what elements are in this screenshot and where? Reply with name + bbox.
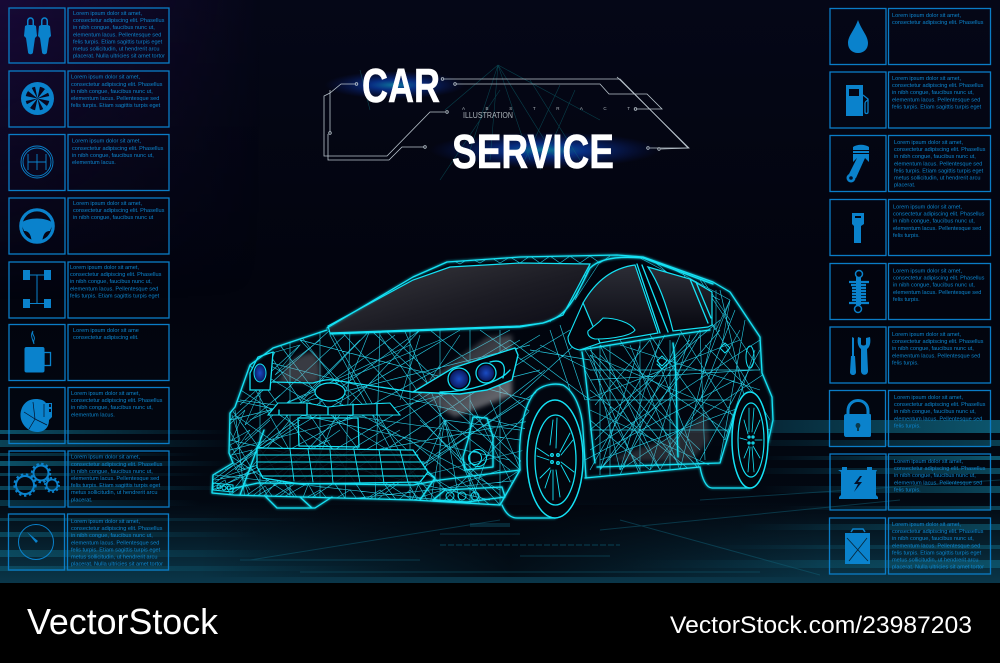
text: consectetur adipiscing elit. Phasellus (72, 146, 164, 152)
text: in nibh congue, faucibus nunc ut, (892, 346, 974, 352)
text: in nibh congue, faucibus nunc ut, (894, 473, 976, 479)
text: in nibh congue, faucibus nunc ut, (893, 219, 975, 225)
text: elementum lacus. Pellentesque sed (894, 161, 982, 167)
text: consectetur adipiscing elit. Phasellus (71, 462, 163, 468)
icon: oil drop (848, 20, 868, 53)
text: in nibh congue, faucibus nunc ut, (71, 469, 153, 475)
car: front wheel (527, 400, 583, 518)
icon: gear shifter (21, 146, 53, 178)
car: A pillar and mirror (568, 303, 635, 350)
text: in nibh congue, faucibus nunc ut, (70, 279, 152, 285)
car: windshield (328, 263, 590, 333)
text: Lorem ipsum dolor sit amet, (73, 11, 142, 17)
text: consectetur adipiscing elit. Phasellus (71, 82, 163, 88)
text: consectetur adipiscing elit. Phasellus (892, 83, 984, 89)
text: Lorem ipsum dolor sit amet, (72, 139, 141, 145)
text: consectetur adipiscing elit. Phasellus (71, 398, 163, 404)
text: felis turpis. Etiam sagittis turpis eget (71, 483, 161, 489)
watermark: brand: VectorStock (27, 601, 219, 642)
text: felis turpis. Etiam sagittis turpis eget (70, 293, 160, 299)
text: elementum lacus. Pellentesque sed (71, 96, 159, 102)
text: felis turpis. Etiam sagittis turpis eget (894, 168, 984, 174)
text: elementum lacus. Pellentesque sed (892, 97, 980, 103)
icon: gears (14, 464, 59, 496)
panel: right 1 oil drop (830, 8, 990, 64)
panel: left 5 chassis (9, 262, 169, 318)
icon: coffee mug (24, 331, 50, 372)
text: Lorem ipsum dolor sit amet, (894, 395, 963, 401)
text: Lorem ipsum dolor sit amet, (71, 519, 140, 525)
car: hood reflections (273, 335, 710, 462)
text: felis turpis. (893, 233, 920, 239)
car: body mesh (205, 250, 780, 510)
text: metus sollicitudin, ut hendrerit arcu (894, 176, 980, 182)
icon: key (852, 213, 864, 243)
text: placerat. Nulla ultricies sit amet tortor (71, 562, 163, 568)
car: small lamps and details (213, 343, 754, 500)
text: felis turpis. (894, 423, 921, 429)
car: side windows (583, 264, 712, 343)
text: elementum lacus. Pellentesque sed (73, 32, 161, 38)
footer band (0, 583, 1000, 663)
text: in nibh congue, faucibus nunc ut, (894, 154, 976, 160)
text: Lorem ipsum dolor sit amet, (71, 455, 140, 461)
text: consectetur adipiscing elit. Phasellus (71, 526, 163, 532)
text: Lorem ipsum dolor sit amet, (73, 201, 142, 207)
text: in nibh congue, faucibus nunc ut, (894, 409, 976, 415)
text: Lorem ipsum dolor sit amet, (892, 332, 961, 338)
panel: left 7 brake disc (9, 388, 169, 444)
text: Lorem ipsum dolor sit amet, (892, 13, 961, 19)
text: felis turpis. Etiam sagittis turpis eget (73, 39, 163, 45)
car: rear wheel (732, 392, 768, 488)
text: felis turpis. (894, 487, 921, 493)
text: in nibh congue, faucibus nunc ut, (73, 25, 155, 31)
panel: left 1 seats (9, 8, 169, 63)
text: Lorem ipsum dolor sit amet, (892, 522, 961, 528)
text: elementum lacus. Pellentesque sed (71, 476, 159, 482)
car: grille and plate (257, 380, 428, 484)
panel: left 3 gear shifter (9, 134, 169, 190)
text: elementum lacus. Pellentesque sed (894, 480, 982, 486)
text: elementum lacus. Pellentesque sed (894, 416, 982, 422)
text: placerat. Nulla ultricies sit amet tortor (892, 565, 984, 571)
text: felis turpis. (892, 360, 919, 366)
text: placerat. Nulla ultricies sit amet tortor (73, 54, 165, 60)
panel: left 9 gauge (8, 514, 168, 570)
text: in nibh congue, faucibus nunc ut, (72, 153, 154, 159)
text: elementum lacus. Pellentesque sed (892, 543, 980, 549)
text: in nibh congue, faucibus nunc ut, (893, 283, 975, 289)
subtitle: abstract: A B S T R A C T (462, 106, 630, 111)
text: Lorem ipsum dolor sit amet, (71, 391, 140, 397)
car: headlights (250, 348, 518, 394)
text: Lorem ipsum dolor sit amet, (70, 265, 139, 271)
icon: battery (838, 467, 878, 499)
text: placerat. (894, 183, 916, 189)
icon: seats (24, 17, 51, 54)
text: in nibh congue, faucibus nunc ut, (892, 90, 974, 96)
watermark: url: VectorStock.com/23987203 (670, 612, 972, 639)
text: in nibh congue, faucibus nunc ut, (892, 536, 974, 542)
wireframe car (205, 250, 780, 518)
text: felis turpis. Etiam sagittis turpis eget (71, 103, 161, 109)
text: felis turpis. (893, 297, 920, 303)
text: felis turpis. Etiam sagittis turpis eget (71, 547, 161, 553)
text: in nibh congue, faucibus nunc ut (73, 215, 154, 221)
icon: piston (846, 145, 869, 182)
car: body outline (212, 255, 773, 518)
text: elementum lacus. (71, 412, 115, 418)
text: metus sollicitudin, ut hendrerit arcu (71, 490, 157, 496)
panel: left 6 coffee mug (9, 324, 169, 380)
text: Lorem ipsum dolor sit amet, (894, 459, 963, 465)
text: elementum lacus. Pellentesque sed (893, 290, 981, 296)
panel: right 6 tools (830, 327, 990, 383)
text: consectetur adipiscing elit. Phasellus (892, 339, 984, 345)
heading: SERVICE: SERVICE (452, 126, 614, 179)
text: elementum lacus. Pellentesque sed (893, 226, 981, 232)
text: consectetur adipiscing elit. Phasellus (894, 402, 986, 408)
text: Lorem ipsum dolor sit amet, (893, 268, 962, 274)
icon: canister (845, 529, 870, 564)
panel: left 2 turbine wheel (9, 71, 169, 127)
panel: right 9 canister (830, 518, 990, 574)
title glow (325, 65, 660, 180)
text: Lorem ipsum dolor sit amet, (893, 204, 962, 210)
heading: CAR: CAR (362, 60, 440, 113)
icon: brake disc (20, 399, 52, 432)
panel: right 5 spring (830, 264, 990, 320)
panel: left 4 steering wheel (9, 198, 169, 254)
text: metus sollicitudin, ut hendrerit arcu (892, 558, 978, 564)
text: Lorem ipsum dolor sit amet, (892, 76, 961, 82)
icon: steering wheel (21, 210, 53, 243)
icon: tools (850, 337, 870, 375)
text: consectetur adipiscing elit. Phasellus (893, 276, 985, 282)
text: Lorem ipsum dolor sit amet, (894, 140, 963, 146)
icon: shock spring (849, 270, 869, 312)
text: in nibh congue, faucibus nunc ut, (71, 405, 153, 411)
text: consectetur adipiscing elit. Phasellus (892, 529, 984, 535)
text: metus sollicitudin, ut hendrerit arcu (73, 46, 159, 52)
text: consectetur adipiscing elit. Phasellus (892, 20, 984, 26)
text: consectetur adipiscing elit. Phasellus (73, 208, 165, 214)
HUD circuit lines (324, 77, 689, 160)
panel: right 8 battery (830, 454, 990, 510)
text: elementum lacus. (72, 160, 116, 166)
subtitle: illustration: ILLUSTRATION (463, 111, 513, 120)
text: elementum lacus. Pellentesque sed (70, 286, 158, 292)
text: felis turpis. Etiam sagittis turpis eget (892, 550, 982, 556)
text: consectetur adipiscing elit. Phasellus (73, 18, 165, 24)
text: consectetur adipiscing elit. Phasellus (894, 147, 986, 153)
text: metus sollicitudin, ut hendrerit arcu (71, 554, 157, 560)
panel: right 3 piston (830, 136, 990, 192)
text: consectetur adipiscing elit. Phasellus (893, 212, 985, 218)
icon: turbine wheel (21, 82, 54, 115)
text: Lorem ipsum dolor sit ame (73, 328, 139, 334)
icon: chassis (23, 270, 51, 308)
icon: fuel pump (846, 85, 868, 116)
panel: right 2 fuel pump (830, 72, 990, 128)
text: consectetur adipiscing elit. Phasellus (894, 466, 986, 472)
panel: right 4 key (830, 200, 990, 256)
text: consectetur adipiscing elit. (73, 335, 139, 341)
text: elementum lacus. Pellentesque sed (71, 540, 159, 546)
text: placerat. (71, 497, 93, 503)
icon: padlock (844, 400, 871, 437)
text: felis turpis. Etiam sagittis turpis eget (892, 104, 982, 110)
text: in nibh congue, faucibus nunc ut, (71, 89, 153, 95)
title block (324, 60, 689, 180)
text: consectetur adipiscing elit. Phasellus (70, 272, 162, 278)
icon: gauge (18, 524, 54, 560)
text: Lorem ipsum dolor sit amet, (71, 75, 140, 81)
panel: right 7 padlock (830, 390, 990, 446)
text: in nibh congue, faucibus nunc ut, (71, 533, 153, 539)
text: elementum lacus. Pellentesque sed (892, 353, 980, 359)
panel: left 8 gears (9, 451, 169, 507)
